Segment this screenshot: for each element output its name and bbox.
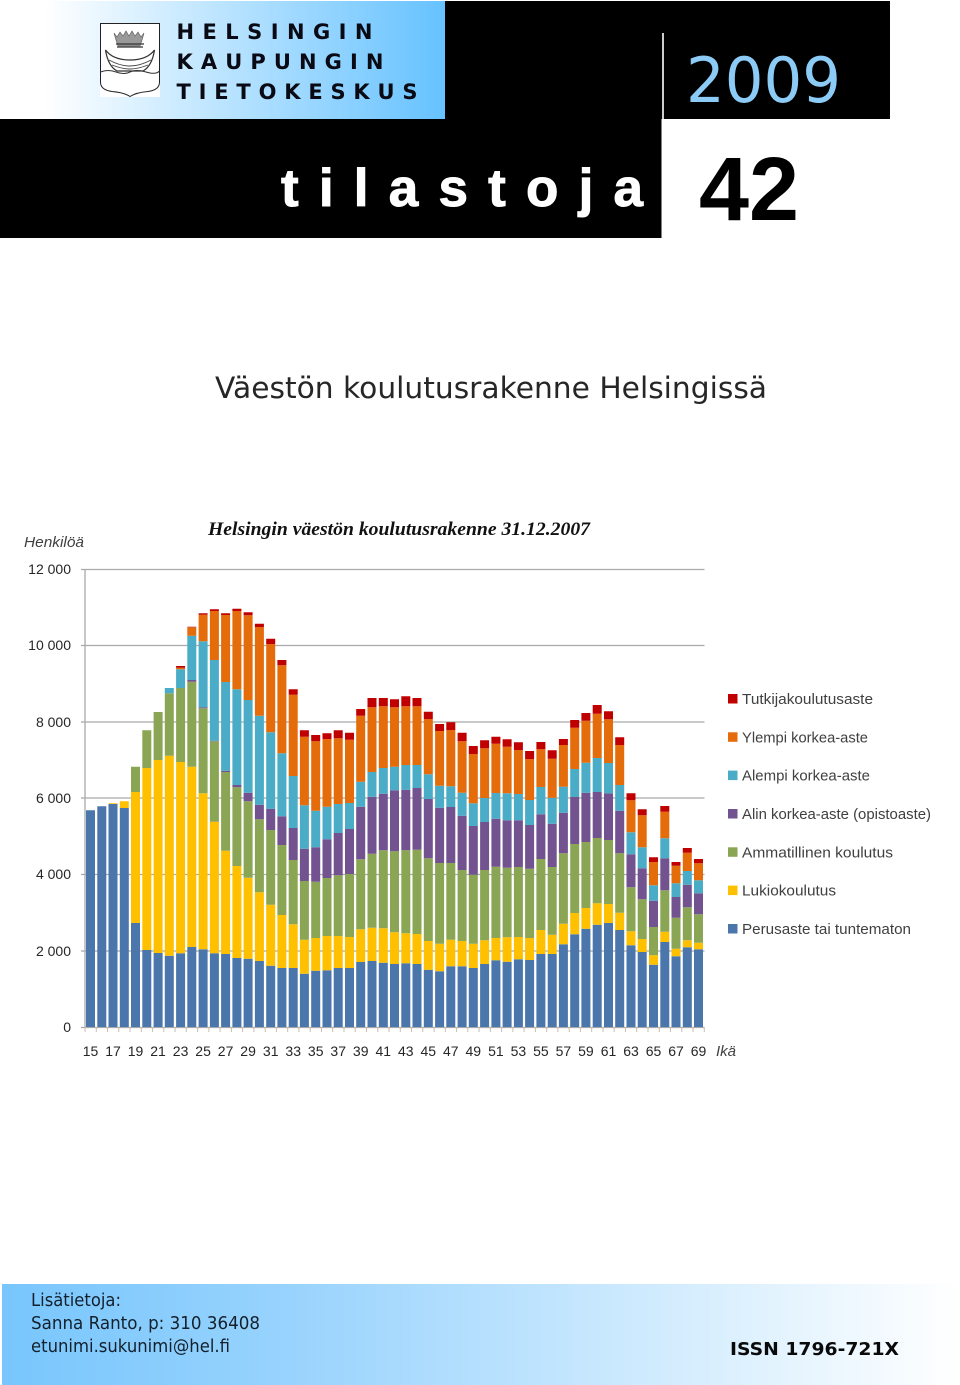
x axis labels: 19 — [128, 1043, 143, 1059]
legend — [728, 692, 931, 938]
x axis labels: 27 — [218, 1043, 234, 1059]
x axis labels: 33 — [285, 1043, 301, 1059]
x axis labels: 65 — [646, 1043, 661, 1059]
legend: Alempi korkea-aste — [742, 769, 870, 785]
y axis labels: 12 000 — [28, 561, 71, 577]
x axis labels: 23 — [173, 1043, 189, 1059]
header: tilastoja band — [0, 119, 662, 238]
x axis labels: 31 — [263, 1043, 279, 1059]
organisation name — [176, 20, 418, 104]
contact information: Lisätietoja: — [31, 1290, 121, 1311]
x axis labels: 35 — [308, 1043, 324, 1059]
bars: Alin korkea-aste (opistoaste) — [192, 680, 699, 927]
x axis labels: 47 — [443, 1043, 459, 1059]
x axis labels: 37 — [330, 1043, 346, 1059]
contact information: Sanna Ranto, p: 310 36408 — [31, 1313, 260, 1334]
x axis labels: 43 — [398, 1043, 414, 1059]
y axis labels: 6 000 — [36, 790, 71, 806]
x axis labels: 69 — [691, 1043, 706, 1059]
legend: Ammatillinen koulutus — [742, 845, 893, 861]
bars: Ammatillinen koulutus — [136, 682, 698, 955]
x axis labels: 25 — [195, 1043, 211, 1059]
x axis labels: 49 — [466, 1043, 481, 1059]
contact information: etunimi.sukunimi@hel.fi — [31, 1336, 230, 1357]
y axis labels: 10 000 — [28, 637, 71, 653]
x axis labels: 61 — [601, 1043, 616, 1059]
icon: Helsinki coat of arms — [100, 23, 160, 97]
y axis title: Henkilöä — [24, 534, 84, 551]
x axis labels: 63 — [623, 1043, 639, 1059]
organisation name: T I E T O K E S K U S — [176, 80, 418, 104]
header: logo panel — [0, 1, 445, 119]
year: 2009 — [686, 44, 841, 117]
x axis labels: 53 — [511, 1043, 526, 1059]
title: Väestön koulutusrakenne Helsingissä — [215, 371, 767, 405]
chart title: Helsingin väestön koulutusrakenne 31.12.2007 — [207, 520, 591, 540]
ISSN: ISSN 1796-721X — [730, 1339, 899, 1360]
x axis labels: 55 — [533, 1043, 549, 1059]
x axis labels: 45 — [421, 1043, 436, 1059]
x axis labels: 21 — [150, 1043, 166, 1059]
x axis labels: 51 — [488, 1043, 504, 1059]
legend: Alin korkea-aste (opistoaste) — [742, 807, 931, 823]
x axis labels: 29 — [240, 1043, 256, 1059]
x axis labels: 39 — [353, 1043, 369, 1059]
y axis labels: 8 000 — [36, 714, 71, 730]
x axis title: Ikä — [716, 1043, 736, 1060]
bars: Tutkijakoulutusaste — [181, 609, 699, 866]
bars: Lukiokoulutus — [113, 756, 698, 974]
bars: Alempi korkea-aste — [169, 636, 699, 901]
y axis labels: 0 — [63, 1019, 71, 1035]
legend: Perusaste tai tuntematon — [742, 922, 911, 938]
chart: population by education level and age — [24, 520, 931, 1060]
organisation name: H E L S I N G I N — [176, 20, 372, 44]
x axis labels: 17 — [105, 1043, 121, 1059]
header: black top band — [445, 1, 890, 119]
x axis labels — [83, 1043, 706, 1059]
legend: Tutkijakoulutusaste — [742, 692, 873, 708]
bars: Perusaste tai tuntematon — [90, 804, 698, 1027]
y axis labels: 2 000 — [36, 943, 71, 959]
organisation name: K A U P U N G I N — [176, 50, 384, 74]
x axis labels: 59 — [578, 1043, 594, 1059]
legend: Lukiokoulutus — [742, 884, 836, 900]
x axis labels: 67 — [668, 1043, 684, 1059]
footer band — [2, 1284, 960, 1385]
series name: t i l a s t o j a — [281, 159, 644, 218]
x axis labels: 41 — [376, 1043, 391, 1059]
contact information — [31, 1290, 260, 1357]
x axis labels: 15 — [83, 1043, 98, 1059]
bars: Ylempi korkea-aste — [181, 611, 699, 885]
x axis labels: 57 — [556, 1043, 571, 1059]
legend: Ylempi korkea-aste — [742, 730, 868, 746]
y axis labels: 4 000 — [36, 866, 71, 882]
y axis labels — [28, 561, 71, 1035]
issue number: 42 — [699, 140, 799, 240]
